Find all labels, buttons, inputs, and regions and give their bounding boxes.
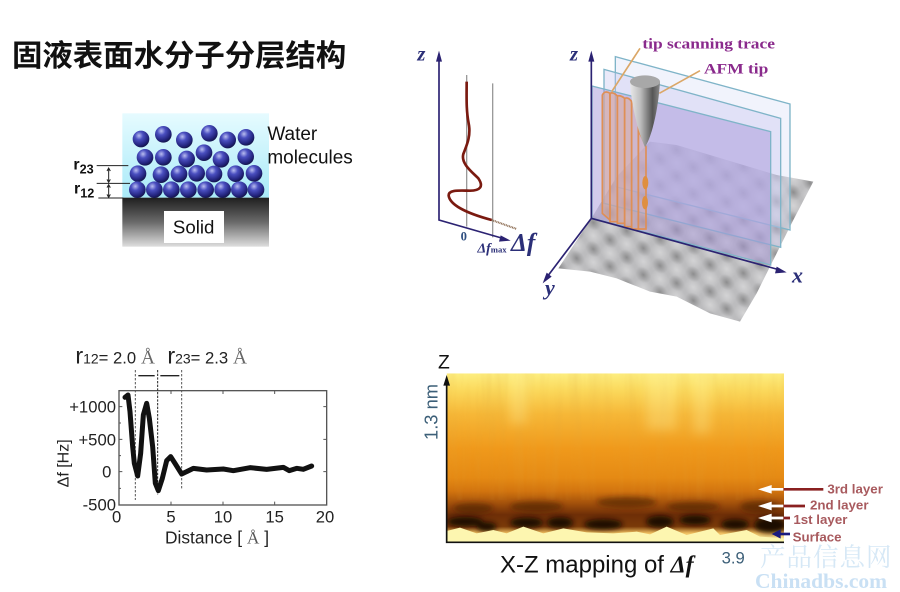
title: 固液表面水分子分层结构 (12, 39, 346, 73)
layer labels (793, 481, 883, 545)
label water molecules: molecules (267, 147, 353, 168)
heading r12 r23: 23= 2.3 Å (175, 347, 247, 368)
panel: force distance plot (56, 342, 334, 547)
label 0: 0 (461, 230, 467, 244)
label r12: 12 (80, 186, 94, 200)
layer labels: Surface (793, 530, 842, 545)
x axis values: 0 (112, 507, 121, 526)
label delta f: Δf (510, 229, 538, 257)
label Z: Z (438, 352, 450, 373)
watermark: 产品信息网 (760, 538, 893, 574)
x axis values (112, 507, 334, 526)
axes (439, 58, 505, 239)
data curve (125, 395, 312, 491)
label 1.3 nm: 1.3 nm (421, 384, 442, 440)
plot frame (119, 391, 327, 505)
watermark (755, 538, 893, 592)
panel: x-z heat map (421, 352, 883, 578)
layer labels: 3rd layer (827, 481, 883, 496)
label AFM tip: AFM tip (704, 61, 768, 77)
spacing arrows (138, 374, 179, 378)
x axis values: 15 (265, 507, 284, 526)
label r23: 23 (80, 162, 94, 176)
layer pointers (770, 489, 823, 534)
heading r12 r23: r (75, 342, 83, 368)
AFM tip (630, 75, 660, 147)
reference lines (467, 75, 493, 237)
label r12: r (74, 180, 80, 197)
water molecule spheres (129, 125, 264, 198)
label tip scanning trace: tip scanning trace (642, 37, 776, 53)
y axis values (69, 398, 116, 515)
surface (558, 142, 813, 322)
guide lines (135, 370, 182, 500)
axis label x: x (791, 263, 803, 288)
scan plane 2 (604, 69, 781, 247)
x axis values: 20 (316, 507, 334, 526)
layer labels: 2nd layer (810, 498, 869, 513)
axis label z: z (569, 44, 578, 66)
panel: AFM 3D scan (542, 37, 813, 322)
y axis title: Δf [Hz] (56, 439, 73, 487)
scan plane 3 (615, 57, 790, 230)
leader lines (612, 48, 700, 93)
layer labels: 1st layer (793, 512, 847, 527)
y axis values: 0 (102, 462, 111, 481)
label r23: r (73, 156, 80, 173)
axes (447, 382, 784, 542)
distance markers (97, 166, 130, 198)
solid label (164, 211, 224, 243)
x axis values: 10 (214, 507, 232, 526)
y axis values: -500 (83, 496, 116, 515)
tip scanning trace (602, 92, 646, 229)
solid label: Solid (173, 216, 214, 237)
label delta f max: Δfmax (476, 242, 507, 257)
label 3.9: 3.9 (722, 548, 745, 567)
water layer (122, 113, 269, 198)
heading r12 r23: r (167, 342, 175, 368)
y axis values: +500 (78, 430, 116, 449)
x axis title: Distance [ Å ] (165, 527, 269, 547)
scan plane 1 (592, 86, 771, 265)
x axis values: 5 (166, 507, 176, 526)
delta f curve (449, 82, 492, 220)
label water molecules: Water (267, 124, 317, 145)
axis label z: z (416, 44, 425, 66)
axis label y: y (542, 275, 555, 300)
panel: force curve schematic (416, 44, 538, 257)
caption: X-Z mapping of Δf (500, 551, 696, 578)
solid block (122, 198, 269, 247)
y axis values: +1000 (69, 398, 116, 417)
panel: water molecules on solid (73, 113, 353, 247)
axes (546, 58, 780, 278)
heat map (447, 373, 786, 542)
heading r12 r23: 12= 2.0 Å (83, 347, 155, 368)
tick marks (119, 391, 327, 505)
